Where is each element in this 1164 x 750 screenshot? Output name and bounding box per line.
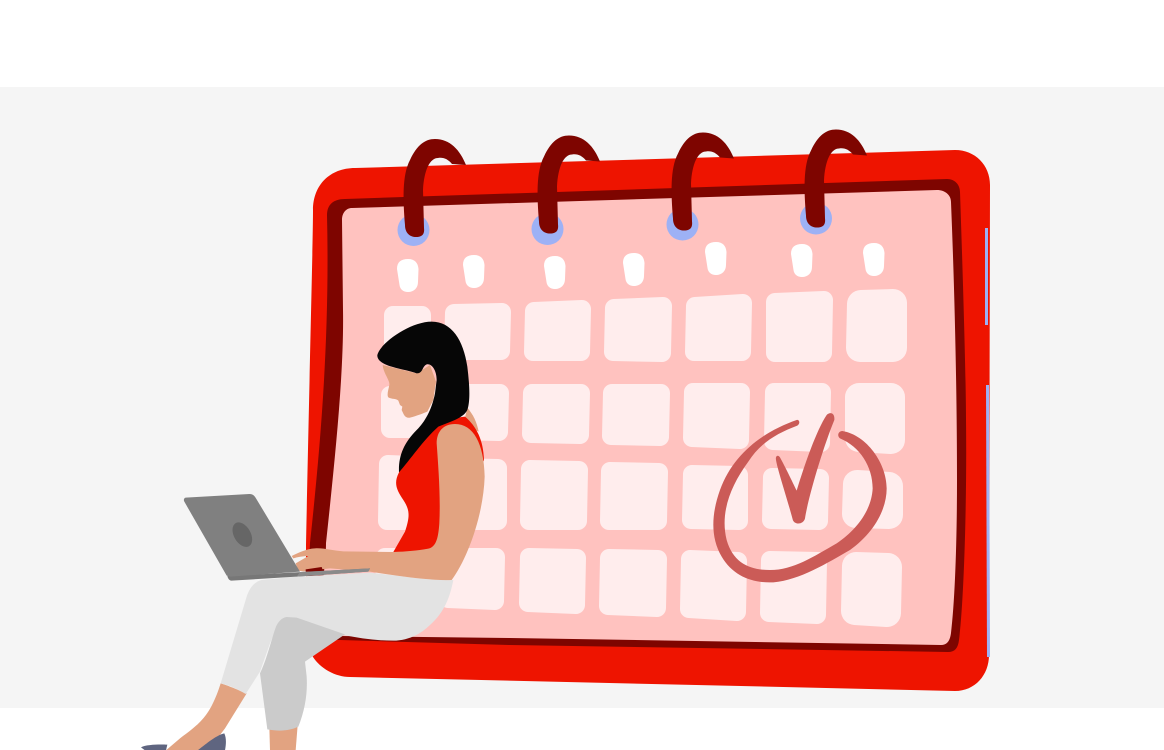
calendar side accent lower bbox=[986, 385, 990, 657]
calendar dark inner border bbox=[305, 179, 966, 652]
upper thigh, light trousers bbox=[221, 573, 453, 694]
date cells bbox=[384, 300, 893, 615]
calendar side accent upper bbox=[985, 228, 988, 325]
calendar outer red body bbox=[306, 150, 990, 691]
laptop base light edge bbox=[297, 568, 370, 577]
left lower leg bbox=[166, 683, 247, 750]
back of neck bbox=[463, 408, 479, 432]
right lower leg bbox=[269, 725, 298, 750]
laptop bbox=[184, 494, 370, 581]
red top bbox=[393, 417, 484, 552]
shoe heel bbox=[198, 733, 226, 750]
crossed leg, darker trousers bbox=[260, 617, 345, 731]
circle stroke bbox=[713, 420, 887, 582]
face bbox=[383, 365, 436, 418]
calendar pink page bbox=[318, 190, 957, 645]
shoe toe bbox=[141, 745, 167, 750]
icon: hand-drawn circled check mark bbox=[713, 413, 887, 582]
binding holes bbox=[398, 202, 832, 246]
hair bbox=[377, 322, 469, 472]
white weekday tabs bbox=[397, 242, 884, 292]
woman working on laptop bbox=[141, 322, 485, 750]
calendar border glimpse under hand bbox=[306, 567, 323, 572]
laptop lid bbox=[184, 494, 300, 577]
laptop base bbox=[227, 568, 370, 581]
laptop logo bbox=[228, 519, 256, 550]
spiral rings bbox=[404, 130, 867, 237]
check stroke bbox=[776, 413, 834, 523]
calendar bbox=[305, 130, 990, 691]
arm and hand bbox=[292, 424, 485, 580]
